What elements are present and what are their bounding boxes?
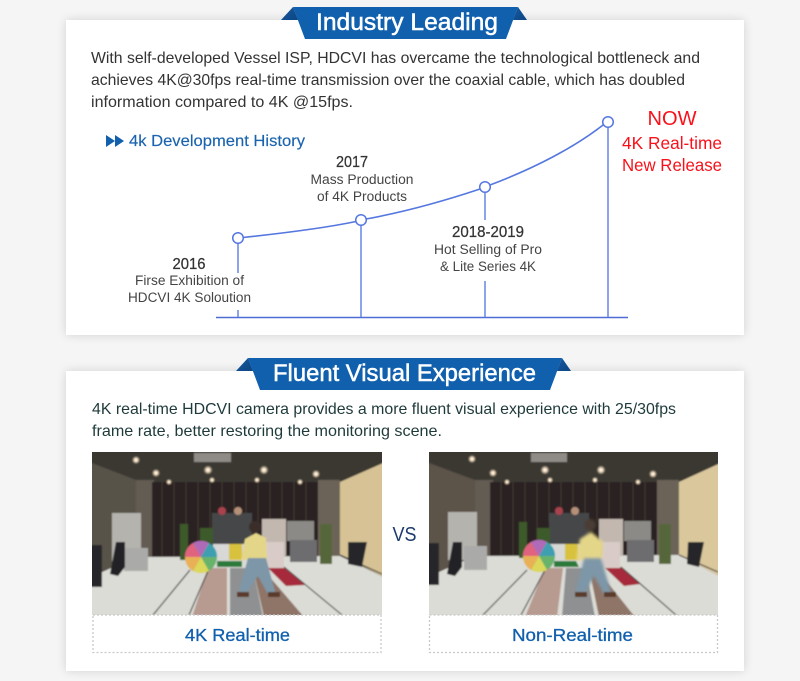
description paragraph: 4K real-time HDCVI camera provides a more fluent visual experience with 25/30fps xyxy=(92,401,676,418)
milestone 2017: 2017 xyxy=(336,154,368,171)
milestone 2016: Firse Exhibition of xyxy=(135,273,244,288)
milestone 2017: Mass Production xyxy=(310,172,414,187)
title ribbon: Fluent Visual Experience: Fluent Visual Experience xyxy=(273,360,536,387)
milestone NOW: 4K Real-time xyxy=(622,133,722,153)
intro paragraph: information compared to 4K @15fps. xyxy=(91,94,353,111)
intro paragraph: achieves 4K@30fps real-time transmission over the coaxial cable, which has doubled xyxy=(91,72,685,89)
title ribbon: Industry Leading: Industry Leading xyxy=(316,9,498,36)
description paragraph: frame rate, better restoring the monitoring scene. xyxy=(92,423,442,440)
milestone 2017 xyxy=(310,154,414,204)
VS label: VS xyxy=(392,524,416,546)
milestone 2018-2019 xyxy=(434,224,542,274)
chart heading: 4k Development History: 4k Development History xyxy=(129,133,305,150)
photo: non-real-time scene xyxy=(429,452,718,615)
milestone 2018-2019: Hot Selling of Pro xyxy=(434,242,542,257)
milestone NOW: New Release xyxy=(622,155,722,175)
title ribbon: Industry Leading xyxy=(281,7,527,39)
photo: 4K real-time scene xyxy=(92,452,382,615)
milestone NOW xyxy=(622,108,722,175)
caption box: Non-Real-time: Non-Real-time xyxy=(512,625,633,645)
caption box: Non-Real-time xyxy=(430,615,718,652)
title ribbon: Fluent Visual Experience xyxy=(236,358,571,390)
milestone 2018-2019: 2018-2019 xyxy=(452,224,524,241)
timeline chart xyxy=(216,117,628,318)
milestone 2018-2019: & Lite Series 4K xyxy=(440,259,536,274)
panel: industry leading xyxy=(66,7,744,335)
milestone NOW: NOW xyxy=(648,108,697,130)
milestone 2016: 2016 xyxy=(172,256,206,273)
caption box: 4K Real-time: 4K Real-time xyxy=(185,625,290,645)
description paragraph xyxy=(92,401,676,440)
milestone 2017: of 4K Products xyxy=(317,189,407,204)
panel: fluent visual experience xyxy=(66,358,744,671)
intro paragraph xyxy=(91,50,700,111)
milestone 2016: HDCVI 4K Soloution xyxy=(128,290,251,305)
intro paragraph: With self-developed Vessel ISP, HDCVI has overcame the technological bottleneck and xyxy=(91,50,700,67)
milestone 2016 xyxy=(128,256,251,305)
caption box: 4K Real-time xyxy=(93,615,381,652)
